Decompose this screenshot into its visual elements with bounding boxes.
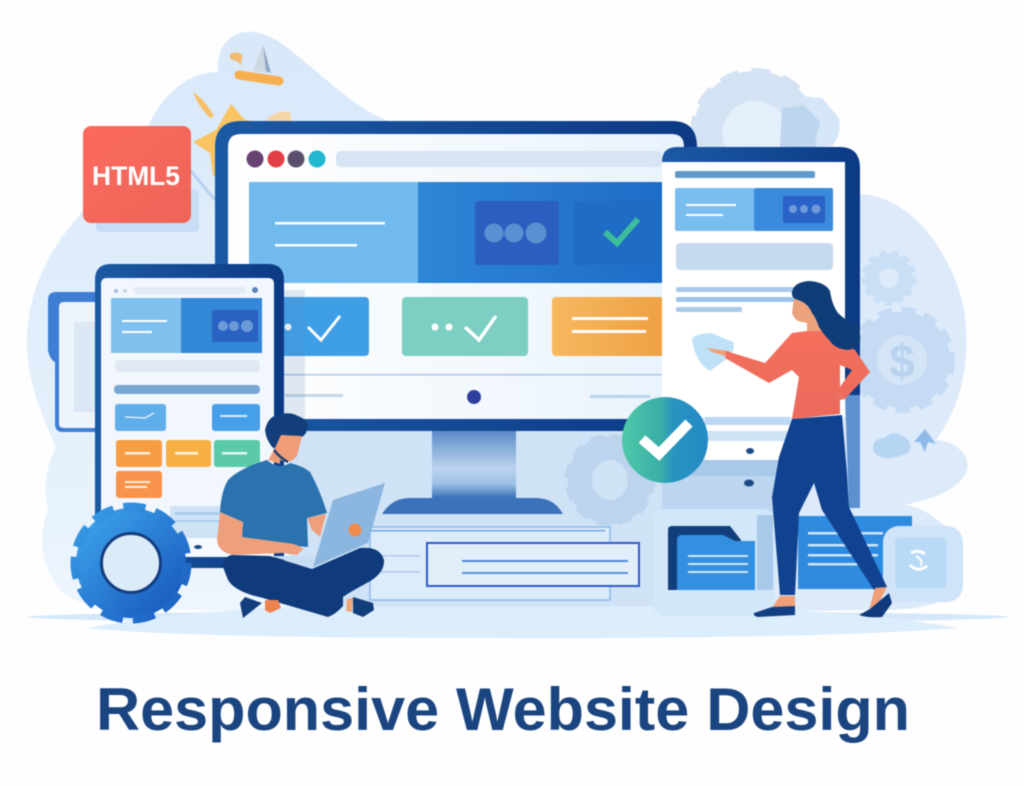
background blob: right xyxy=(650,194,968,612)
badge: HTML5 xyxy=(83,126,199,232)
desktop monitor xyxy=(215,121,697,514)
icon: decorative top tools xyxy=(190,45,292,200)
man face and neck xyxy=(268,435,302,464)
badge: HTML5: HTML5 xyxy=(92,161,180,191)
man near arm xyxy=(217,512,303,555)
woman legs skin xyxy=(772,587,887,610)
phone lower stripes xyxy=(170,506,274,557)
man hair xyxy=(265,413,308,448)
monitor stand xyxy=(382,431,563,514)
icon: gear behind check badge xyxy=(569,438,651,522)
woman face and neck xyxy=(792,298,822,334)
browser dots xyxy=(246,150,326,168)
phone mockup xyxy=(95,264,284,570)
icon: cloud and arrow xyxy=(873,429,936,458)
icon: background gear top right xyxy=(695,73,840,193)
tablet hero xyxy=(675,188,833,231)
man legs xyxy=(223,548,384,617)
woman shoes xyxy=(754,606,795,617)
card: blue xyxy=(270,297,369,356)
icon: refresh widget xyxy=(883,526,963,602)
tablet frame xyxy=(662,147,860,395)
small device behind phone xyxy=(48,292,100,432)
icon: folder xyxy=(653,509,775,616)
tablet mockup xyxy=(662,147,860,508)
tablet header bar xyxy=(675,171,815,178)
tablet base band xyxy=(662,417,790,486)
lower monitor backdrop xyxy=(290,428,792,606)
icon: small background gear xyxy=(864,253,914,303)
monitor screen xyxy=(228,134,684,419)
tablet screen xyxy=(662,162,845,417)
card: teal xyxy=(402,297,528,356)
man shirt xyxy=(220,460,327,547)
background blob: left xyxy=(27,32,640,612)
figure: standing woman xyxy=(707,281,892,617)
icon: dollar gear: $ xyxy=(889,335,915,387)
icon: check badge xyxy=(622,397,708,483)
man far arm xyxy=(307,514,326,537)
phone body xyxy=(95,264,284,570)
woman hand xyxy=(707,348,732,358)
figure: seated man with laptop xyxy=(217,413,385,618)
man socks and shoes xyxy=(265,600,281,613)
footer of screen xyxy=(284,374,664,404)
hero banner xyxy=(249,182,664,283)
woman hand on hip xyxy=(835,391,845,401)
phone bars xyxy=(115,360,260,372)
icon: dollar gear xyxy=(853,311,951,409)
tablet grey block xyxy=(676,243,833,270)
tablet text lines xyxy=(676,287,801,312)
woman pants xyxy=(772,415,887,595)
monitor bezel xyxy=(215,121,697,431)
phone hero xyxy=(111,298,262,353)
front card xyxy=(427,543,639,586)
icon: large blue gear xyxy=(75,507,187,619)
phone screen xyxy=(101,278,274,557)
phone shadow on monitor xyxy=(284,290,305,419)
woman hair xyxy=(792,281,860,350)
document stack xyxy=(370,527,639,600)
woman top xyxy=(725,331,870,419)
touch highlight xyxy=(692,333,734,371)
address bar xyxy=(114,287,258,294)
laptop xyxy=(270,483,385,568)
title: Responsive Website Design xyxy=(96,676,910,743)
phone cards xyxy=(115,404,260,498)
card: orange xyxy=(552,297,664,356)
address bar xyxy=(336,151,662,167)
floor shadow xyxy=(28,604,1008,638)
right blue panel xyxy=(798,516,912,589)
